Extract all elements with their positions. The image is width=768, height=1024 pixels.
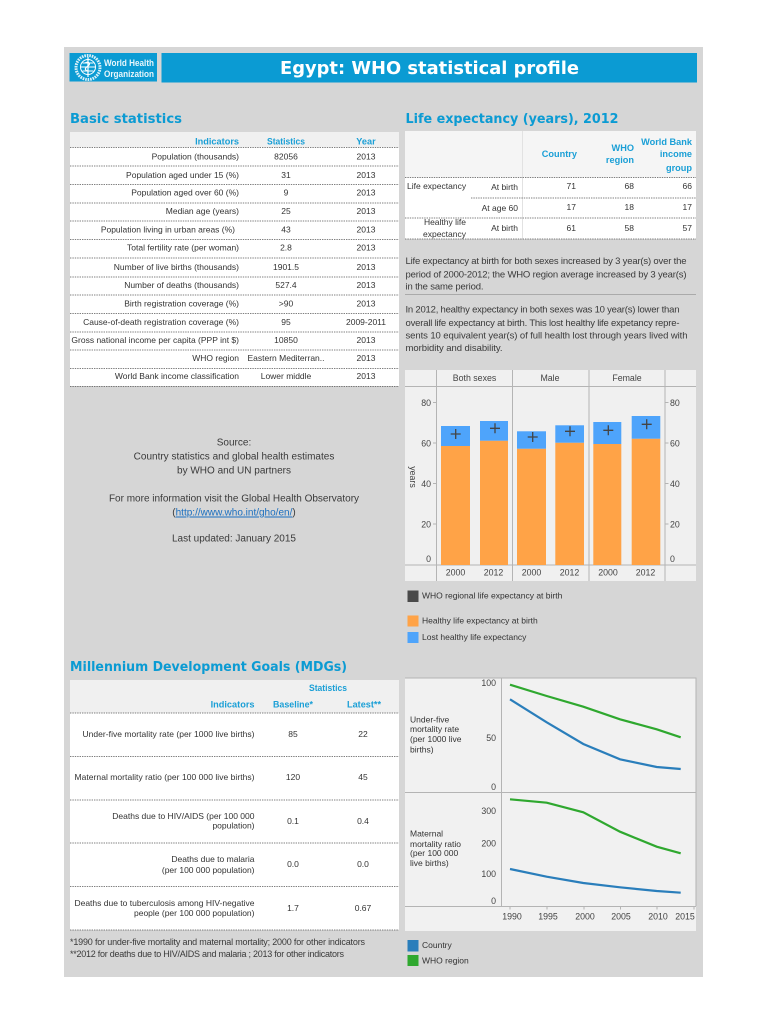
row: median age: 25	[281, 206, 291, 216]
x axis years	[446, 568, 655, 578]
row: tuberculosis: 0.67	[355, 903, 372, 913]
x axis years: 2012	[636, 568, 655, 578]
right axis: 0	[670, 554, 675, 564]
x axis years: 2010	[648, 912, 668, 922]
chart axis: maternal	[481, 806, 496, 906]
x axis years: 1995	[538, 912, 558, 922]
footnotes	[70, 937, 366, 959]
WHO logo	[70, 53, 157, 82]
row: HIV: Deaths due to HIV/AIDS (per 100 000	[112, 811, 255, 821]
column headers: Baseline*	[273, 700, 313, 710]
row: urban: Population living in urban areas (%)	[101, 224, 235, 234]
footnotes: **2012 for deaths due to HIV/AIDS and malaria ; 2013 for other indicators	[70, 949, 344, 959]
row: maternal: 120	[286, 772, 300, 782]
row: life expectancy at birth: 68	[625, 181, 634, 191]
life expectancy commentary: Life expectancy at birth for both sexes increased by 3 year(s) over the	[406, 256, 686, 267]
row: cause of death: Cause-of-death registration coverage (%)	[83, 317, 239, 327]
chart axis: under-five: 100	[481, 678, 496, 688]
row: fertility: Total fertility rate (per woman)	[127, 242, 239, 252]
row: healthy life expectancy: Healthy life	[424, 217, 466, 227]
source note: For more information visit the Global Health Observatory	[109, 494, 359, 504]
column headers: Statistics	[309, 683, 347, 693]
row: healthy life expectancy: expectancy	[423, 229, 467, 239]
heading: MDGs: Millennium Development Goals (MDGs)	[70, 659, 347, 675]
line: WHO region under-five	[510, 685, 681, 737]
x axis years: 2000	[522, 568, 541, 578]
row: world bank	[115, 371, 376, 381]
left axis: 0	[426, 554, 431, 564]
row: life expectancy at birth: 66	[683, 181, 692, 191]
x axis years: 2012	[560, 568, 579, 578]
row: HIV	[112, 811, 369, 830]
x axis years: 2000	[446, 568, 465, 578]
chart label: under-five: Under-five	[410, 714, 449, 724]
chart label: maternal: mortality ratio	[410, 839, 461, 849]
row: at age 60: 17	[683, 202, 692, 212]
column headers	[211, 683, 381, 710]
row: cause of death: 2009-2011	[346, 317, 386, 327]
source note: (http://www.who.int/gho/en/)	[172, 508, 296, 518]
row: median age: 2013	[357, 206, 376, 216]
chart label: maternal: (per 100 000	[410, 848, 458, 858]
row: tuberculosis: people (per 100 000 population)	[134, 908, 255, 918]
row: life expectancy at birth	[407, 181, 692, 192]
row: income: Gross national income per capita (PPP int $)	[71, 335, 239, 345]
row: population: 2013	[357, 152, 376, 162]
column headers	[542, 137, 693, 173]
chart axis: maternal: 0	[491, 896, 496, 906]
row: population: Population (thousands)	[152, 152, 239, 162]
column headers: region	[606, 155, 634, 165]
row: at age 60	[482, 202, 692, 213]
right axis	[665, 398, 680, 564]
table: MDGs	[70, 680, 399, 930]
title bar	[162, 53, 697, 82]
row: under-five: 85	[288, 729, 298, 739]
left axis: 60	[421, 438, 431, 448]
logo wordmark: Organization	[104, 69, 154, 80]
row: population	[152, 152, 376, 162]
row: birth registration	[124, 298, 376, 308]
row: malaria: 0.0	[287, 859, 299, 869]
life expectancy commentary: overall life expectancy at birth. This lost healthy life expetancy repre-	[406, 318, 680, 329]
row: over 60	[131, 188, 376, 198]
column headers: Country	[542, 149, 578, 159]
lost healthy life expectancy bars	[441, 416, 660, 449]
row: cause of death	[83, 317, 386, 327]
row: fertility	[127, 242, 376, 252]
row: maternal: 45	[358, 772, 368, 782]
header	[70, 53, 697, 82]
column headers: WHO	[612, 143, 634, 153]
heading: basic statistics: Basic statistics	[70, 111, 182, 127]
line charts: mortality	[405, 678, 696, 931]
row: fertility: 2013	[357, 242, 376, 252]
row: live births: 1901.5	[273, 262, 299, 272]
x axis years: 2000	[575, 912, 595, 922]
row: healthy life expectancy: At birth	[491, 223, 518, 233]
table: life expectancy	[405, 131, 696, 239]
line: country maternal	[510, 869, 681, 893]
left axis	[408, 398, 436, 564]
chart axis: maternal: 300	[481, 806, 496, 816]
row: over 60: 2013	[357, 188, 376, 198]
table: basic statistics	[70, 132, 399, 386]
row: world bank: 2013	[357, 371, 376, 381]
title bar: Egypt: WHO statistical profile	[280, 58, 579, 79]
life expectancy commentary: sents 10 equivalent year(s) of full health lost through years lived with	[406, 330, 688, 342]
column headers: income	[660, 149, 692, 159]
row: world bank: World Bank income classification	[115, 371, 239, 381]
chart axis: under-five: 0	[491, 782, 496, 792]
row: over 60: Population aged over 60 (%)	[131, 188, 239, 198]
row: urban	[101, 224, 376, 234]
row: under 15: 31	[281, 170, 291, 180]
right axis: 80	[670, 398, 680, 408]
row: malaria: Deaths due to malaria	[171, 854, 255, 864]
icon: WHO emblem	[76, 56, 100, 80]
panel headers	[453, 373, 642, 383]
WHO regional markers	[451, 419, 652, 442]
row: HIV: 0.1	[287, 816, 299, 826]
x axis years	[502, 912, 695, 922]
row: income	[71, 335, 376, 345]
row: maternal: Maternal mortality ratio (per 100 000 live births)	[74, 772, 255, 782]
chart label: maternal: live births)	[410, 858, 449, 868]
row: live births	[114, 262, 376, 272]
row: malaria: (per 100 000 population)	[162, 865, 255, 875]
chart label: under-five: (per 1000 live	[410, 734, 462, 744]
row: birth registration: 2013	[357, 298, 376, 308]
chart label: maternal	[410, 828, 461, 868]
row: healthy life expectancy: 61	[567, 223, 576, 233]
bar chart legend	[408, 590, 563, 643]
chart axis: maternal: 100	[481, 869, 496, 879]
healthy life expectancy bars	[441, 439, 660, 565]
row: healthy life expectancy: 58	[625, 223, 634, 233]
row: at age 60: 18	[625, 202, 634, 212]
column headers: Year	[356, 136, 376, 146]
row: life expectancy at birth: Life expectancy	[407, 181, 467, 191]
row: birth registration: >90	[279, 298, 293, 308]
right axis: 20	[670, 520, 680, 530]
line: country under-five	[510, 699, 681, 769]
chart label: under-five: births)	[410, 744, 434, 754]
row: deaths: Number of deaths (thousands)	[124, 280, 239, 290]
bar chart legend: Healthy life expectancy at birth	[422, 616, 538, 626]
bar chart: life expectancy	[405, 370, 696, 581]
x axis years: 1990	[502, 912, 522, 922]
row: cause of death: 95	[281, 317, 291, 327]
row: under-five	[82, 729, 368, 739]
grey page panel	[64, 47, 703, 977]
line: WHO region maternal	[510, 799, 681, 853]
row: malaria	[162, 854, 369, 875]
row: region: WHO region	[192, 353, 239, 363]
chart label: under-five	[410, 714, 462, 754]
row: deaths	[124, 280, 376, 290]
heading: life expectancy: Life expectancy (years), 2012	[406, 111, 618, 127]
row: fertility: 2.8	[280, 242, 292, 252]
life expectancy commentary	[405, 256, 696, 354]
column headers: Indicators	[195, 136, 239, 146]
column headers: Latest**	[347, 700, 381, 710]
life expectancy commentary: In 2012, healthy expectancy in both sexes was 10 year(s) lower than	[406, 304, 680, 316]
logo wordmark: World Health	[104, 58, 154, 69]
row: deaths: 2013	[357, 280, 376, 290]
bar chart legend: WHO regional life expectancy at birth	[422, 590, 563, 600]
row: over 60: 9	[284, 188, 289, 198]
row: region: 2013	[357, 353, 376, 363]
life expectancy commentary: period of 2000-2012; the WHO region average increased by 3 year(s)	[406, 270, 686, 280]
source note: Source:	[217, 438, 251, 448]
source note: Country statistics and global health estimates	[134, 452, 334, 462]
panel headers: Both sexes	[453, 373, 497, 383]
row: population: 82056	[274, 152, 298, 162]
life expectancy commentary: morbidity and disability.	[406, 343, 502, 354]
row: at age 60: 17	[567, 202, 576, 212]
row: under 15: 2013	[357, 170, 376, 180]
line chart legend: Country	[422, 940, 453, 950]
row: median age: Median age (years)	[166, 206, 239, 216]
column headers: Indicators	[211, 700, 254, 710]
row: life expectancy at birth: 71	[567, 181, 576, 191]
logo wordmark	[104, 58, 154, 80]
column headers: Statistics	[267, 136, 305, 146]
x axis years: 2005	[611, 912, 631, 922]
row: malaria: 0.0	[357, 859, 369, 869]
row: tuberculosis: 1.7	[287, 903, 299, 913]
row: birth registration: Birth registration coverage (%)	[124, 298, 239, 308]
column headers: group	[666, 163, 692, 173]
chart label: maternal: Maternal	[410, 828, 443, 838]
row: income: 10850	[274, 335, 298, 345]
x axis years: 2000	[598, 568, 618, 578]
source note: by WHO and UN partners	[177, 466, 291, 476]
row: healthy life expectancy: 57	[683, 223, 692, 233]
row: under 15: Population aged under 15 (%)	[126, 170, 239, 180]
row: healthy life expectancy	[423, 217, 692, 239]
line chart legend: WHO region	[422, 956, 469, 966]
panel headers: Female	[612, 373, 642, 383]
line chart legend	[408, 940, 469, 966]
row: world bank: Lower middle	[261, 371, 312, 381]
column headers	[195, 136, 376, 146]
footnotes: *1990 for under-five mortality and maternal mortality; 2000 for other indicators	[70, 937, 366, 947]
row: median age	[166, 206, 376, 216]
right axis: 60	[670, 438, 680, 448]
row: deaths: 527.4	[275, 280, 297, 290]
panel headers: Male	[540, 373, 560, 383]
row: region	[192, 353, 376, 363]
left axis: 40	[421, 479, 431, 489]
row: region: Eastern Mediterran..	[247, 353, 325, 363]
row: live births: Number of live births (thousands)	[114, 262, 239, 272]
row: tuberculosis	[74, 898, 372, 918]
row: maternal	[74, 772, 368, 782]
left axis: 80	[421, 398, 431, 408]
row: urban: 2013	[357, 224, 376, 234]
row: under 15	[126, 170, 376, 180]
source note: Last updated: January 2015	[172, 534, 296, 544]
left axis: 20	[421, 520, 431, 530]
x axis years: 2015	[675, 912, 695, 922]
column headers: World Bank	[641, 137, 693, 147]
row: life expectancy at birth: At birth	[491, 182, 518, 192]
row: live births: 2013	[357, 262, 376, 272]
source note	[109, 438, 359, 544]
row: income: 2013	[357, 335, 376, 345]
left axis: years	[408, 466, 418, 488]
chart axis: maternal: 200	[481, 838, 496, 848]
row: HIV: 0.4	[357, 816, 369, 826]
chart axis: under-five	[481, 678, 496, 792]
row: under-five: Under-five mortality rate (per 1000 live births)	[82, 729, 255, 739]
life expectancy commentary: in the same period.	[406, 282, 484, 292]
row: urban: 43	[281, 224, 291, 234]
bar chart legend: Lost healthy life expectancy	[422, 632, 527, 642]
x axis years: 2012	[484, 568, 503, 578]
row: tuberculosis: Deaths due to tuberculosis among HIV-negative	[74, 898, 255, 908]
chart axis: under-five: 50	[486, 733, 496, 743]
row: HIV: population)	[212, 820, 255, 830]
right axis: 40	[670, 479, 680, 489]
row: at age 60: At age 60	[482, 203, 518, 213]
chart label: under-five: mortality rate	[410, 724, 459, 734]
row: under-five: 22	[358, 729, 368, 739]
